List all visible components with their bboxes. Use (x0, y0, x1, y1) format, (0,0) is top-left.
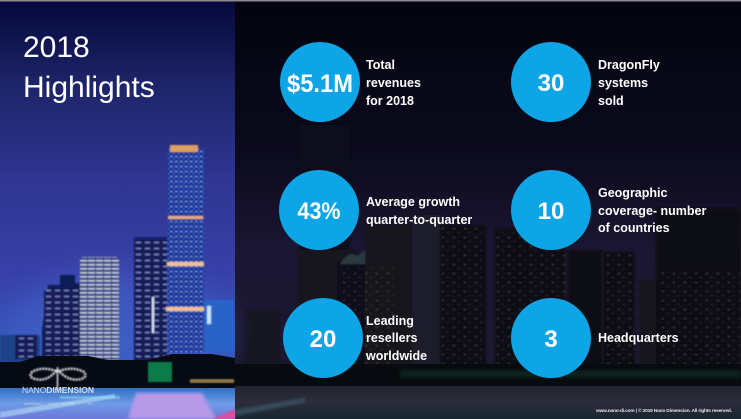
panel: left city photo (0, 0, 235, 419)
title: Highlights (23, 71, 155, 104)
label: revenues (366, 76, 421, 90)
label: Leading (366, 314, 414, 328)
label: Total (366, 58, 395, 72)
value: 43% (298, 198, 340, 225)
title: 2018 (23, 31, 90, 64)
stat: revenues (280, 42, 421, 122)
ticker text: NASDAQ / TASE: NNDM (24, 402, 74, 406)
label: Average growth (366, 195, 460, 209)
footer copyright: www.nano-di.com | © 2019 Nano Dimension. All rights reserved. (595, 407, 732, 414)
stat: countries (511, 170, 707, 250)
label: of countries (598, 221, 670, 235)
stat: resellers (283, 298, 427, 378)
label: systems (598, 76, 648, 90)
value: 3 (544, 326, 558, 353)
label: sold (598, 94, 624, 108)
stat: headquarters (511, 298, 679, 378)
label: quarter-to-quarter (366, 213, 472, 227)
value: 30 (538, 70, 564, 97)
label: for 2018 (366, 94, 414, 108)
circle (511, 298, 591, 378)
circle (279, 170, 359, 250)
logo: Nano Dimension (22, 367, 94, 406)
value: 20 (310, 326, 336, 353)
value: 10 (538, 198, 564, 225)
stat: growth (279, 170, 472, 250)
label: resellers (366, 331, 417, 345)
circle (511, 170, 591, 250)
circle (283, 298, 363, 378)
top edge strip (0, 0, 741, 2)
circle (280, 42, 360, 122)
slide number: 17 (88, 402, 92, 406)
panel: dark city background (235, 0, 741, 419)
icon: dragonfly (31, 367, 85, 389)
stat: systems sold (511, 42, 660, 122)
label: Headquarters (598, 331, 679, 345)
label: Geographic (598, 186, 668, 200)
label: coverage- number (598, 204, 707, 218)
logo wordmark: NANODIMENSION (22, 385, 94, 395)
value: $5.1M (287, 70, 353, 98)
label: DragonFly (598, 58, 660, 72)
circle (511, 42, 591, 122)
label: worldwide (365, 349, 427, 363)
